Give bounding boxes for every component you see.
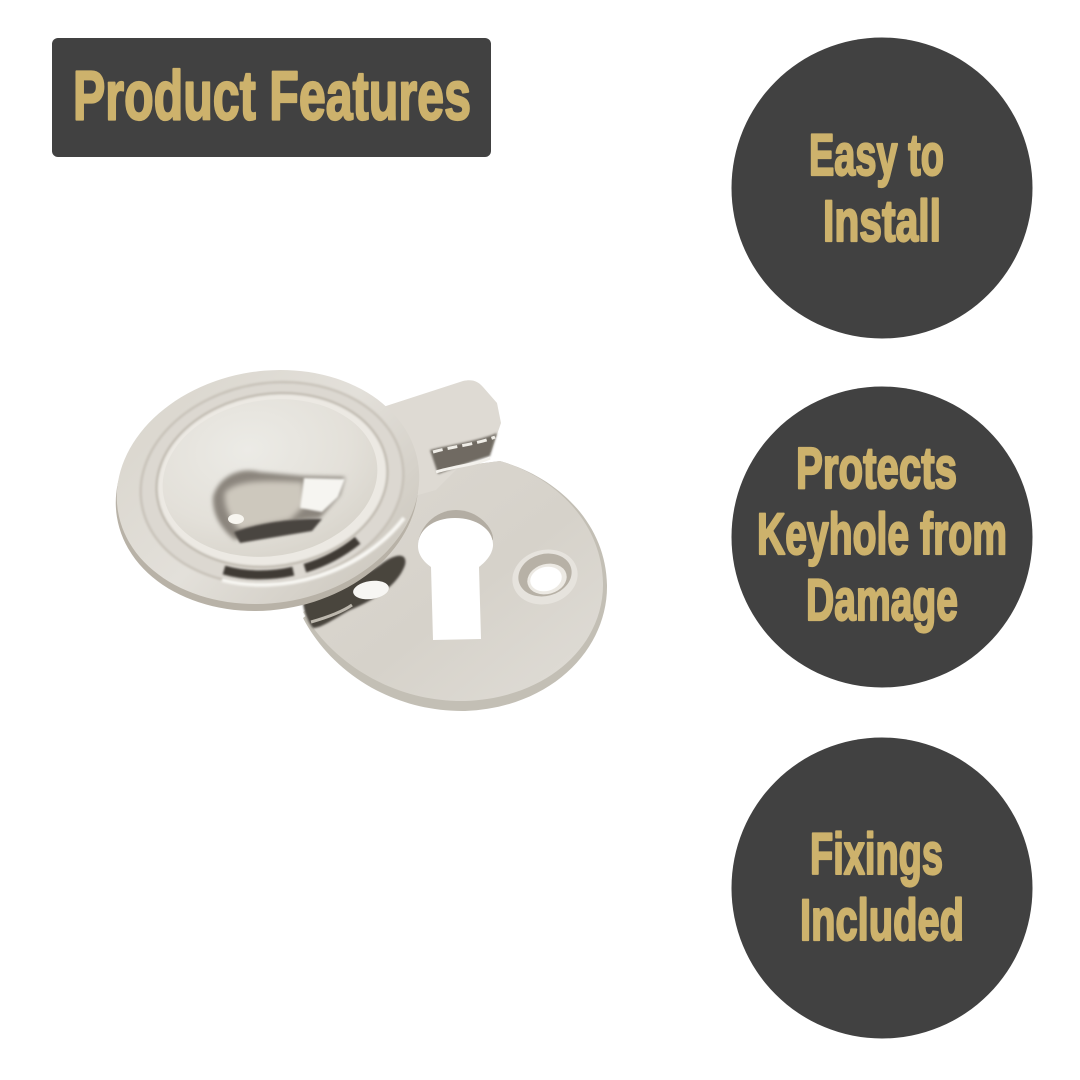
feature badge: fixings included [732,738,1032,1038]
dome highlight and reflections [151,384,389,572]
feature badge: easy to install: Easy to [809,123,944,188]
title: Product Features [73,56,471,134]
product image: keyhole escutcheon [99,349,607,711]
feature badge: protects keyhole from damage: Damage [806,568,958,633]
pivot tab [380,380,501,500]
swing cover outer disc [99,349,436,632]
keyhole opening [418,510,493,640]
title banner [52,38,491,157]
feature badge: easy to install [732,38,1032,338]
feature badge: protects keyhole from damage [732,386,1032,688]
feature badge: easy to install: Install [823,189,941,254]
feature badge: protects keyhole from damage: Protects [796,436,957,501]
feature badge: fixings included: Fixings [810,822,943,887]
shadowed lower hole on plate [303,556,405,628]
back plate [303,461,607,711]
screw hole [506,542,584,612]
feature badge: fixings included: Included [800,888,964,953]
